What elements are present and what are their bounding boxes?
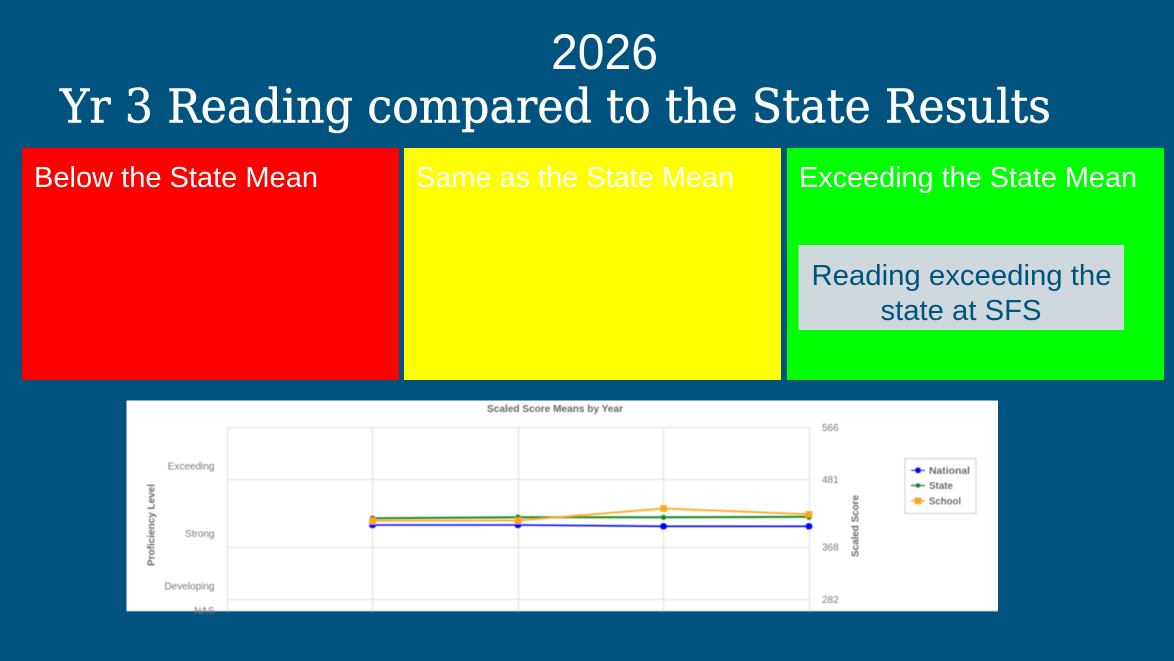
title	[59, 24, 1051, 134]
right axis: scaled scores: 566	[822, 423, 839, 434]
panel: below the state mean: Below the State Mean	[34, 162, 318, 194]
title: Yr 3 Reading compared to the State Results	[59, 80, 1051, 134]
right axis: scaled scores: 368	[822, 542, 839, 554]
left axis title: Proficiency Level	[146, 484, 158, 566]
legend: School	[929, 496, 961, 507]
series: school	[369, 505, 812, 524]
left axis: proficiency levels: Exceeding	[168, 462, 214, 472]
title: 2026	[551, 24, 658, 80]
chart title: Scaled Score Means by Year	[487, 404, 623, 415]
left axis: proficiency levels: Strong	[185, 529, 214, 540]
right axis: scaled scores: 282	[822, 595, 839, 606]
panel: exceeding the state mean	[787, 148, 1164, 380]
left axis: proficiency levels: Developing	[164, 582, 214, 592]
callout: reading exceeding the state	[798, 245, 1124, 330]
callout: reading exceeding the state: state at SFS	[880, 295, 1042, 327]
series: state	[370, 514, 812, 521]
legend	[905, 458, 976, 514]
panel: exceeding the state mean: Exceeding the State Mean	[799, 162, 1137, 194]
panel: below the state mean	[22, 148, 399, 380]
right axis: scaled scores: 481	[822, 475, 839, 486]
legend: State	[929, 481, 953, 492]
legend: National	[929, 466, 970, 477]
callout: reading exceeding the state: Reading exceeding the	[812, 260, 1112, 292]
line chart: scaled score means by year	[126, 400, 998, 617]
right axis title: Scaled Score	[850, 495, 862, 557]
left axis: proficiency levels	[164, 462, 215, 617]
panel: same as the state mean: Same as the State Mean	[416, 162, 734, 194]
series: national	[369, 522, 812, 530]
right axis: scaled scores	[822, 423, 839, 606]
left axis: proficiency levels: NAS	[194, 606, 215, 617]
panel: same as the state mean	[404, 148, 781, 380]
